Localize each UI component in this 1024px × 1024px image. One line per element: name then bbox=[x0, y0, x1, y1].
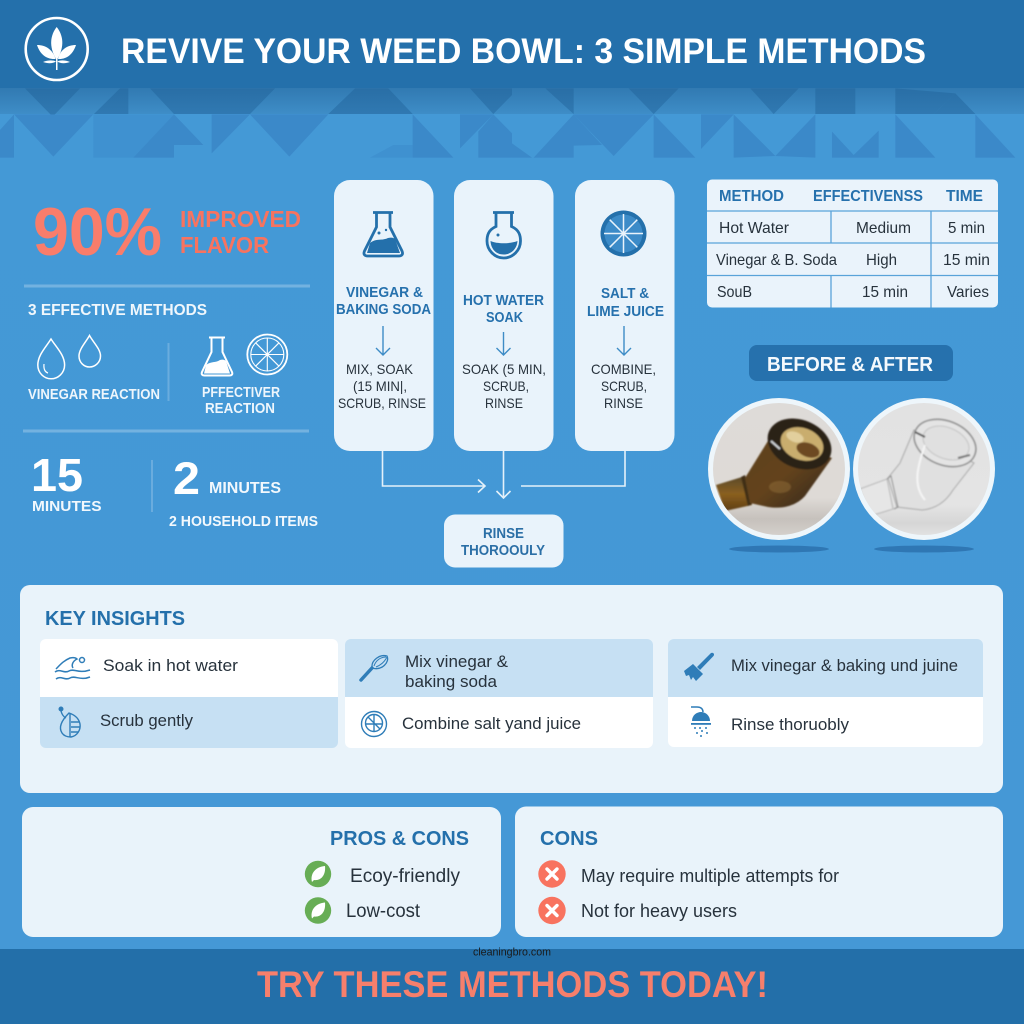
table rows: SouB bbox=[717, 284, 752, 301]
method name: LIME JUICE bbox=[587, 304, 664, 320]
method name bbox=[587, 286, 664, 320]
stat: 15 minutes: MINUTES bbox=[32, 498, 102, 515]
table rows bbox=[716, 220, 990, 301]
insight column 1 bbox=[40, 639, 338, 748]
text: eco friendly: Ecoy-friendly bbox=[350, 866, 460, 887]
panel: salt and lime juice method bbox=[575, 180, 674, 451]
stat: 2 minutes bbox=[173, 453, 281, 504]
text: combine: Combine salt yand juice bbox=[402, 714, 581, 733]
footer banner bbox=[0, 949, 1024, 1024]
geometric triangle pattern band bbox=[0, 88, 1024, 158]
label: vinegar reaction: VINEGAR REACTION bbox=[28, 387, 160, 403]
icon: waves bbox=[55, 658, 90, 679]
panel: cons bbox=[515, 806, 1003, 937]
table rows: Vinegar & B. Soda bbox=[716, 252, 837, 269]
arrow bbox=[617, 326, 631, 355]
label: effectiver reaction: PFFECTIVER bbox=[202, 385, 280, 401]
insight column 3 bbox=[668, 639, 983, 747]
stat: 15 minutes: 15 bbox=[31, 449, 83, 501]
panel: vinegar and baking soda method bbox=[334, 180, 434, 451]
text: rinse: Rinse thoruobly bbox=[731, 715, 849, 734]
method name: BAKING SODA bbox=[336, 302, 431, 318]
steps: SCRUB, RINSE bbox=[338, 395, 426, 411]
method name: HOT WATER bbox=[463, 293, 544, 309]
photo: clean glass pipe after bbox=[853, 398, 995, 552]
steps: COMBINE, bbox=[591, 361, 656, 377]
steps: SCRUB, bbox=[601, 378, 647, 394]
method name: SALT & bbox=[601, 286, 649, 302]
heading: key insights: KEY INSIGHTS bbox=[45, 608, 185, 630]
icon: leaf scrub bbox=[59, 707, 80, 737]
comparison table bbox=[707, 180, 998, 308]
icon: whisk bbox=[361, 656, 388, 680]
table rows: Varies bbox=[947, 284, 989, 301]
steps bbox=[591, 361, 656, 411]
photo: dirty pipe before bbox=[708, 398, 850, 552]
method name bbox=[463, 293, 544, 326]
text: heavy users: Not for heavy users bbox=[581, 901, 737, 921]
text: scrub: Scrub gently bbox=[100, 711, 193, 730]
icon: lemon half bbox=[362, 712, 386, 736]
text: mix bbox=[405, 652, 509, 691]
stat: 15 minutes bbox=[31, 449, 102, 515]
text: low cost: Low-cost bbox=[346, 901, 421, 922]
table rows: 15 min bbox=[862, 284, 908, 301]
title: REVIVE YOUR WEED BOWL: 3 SIMPLE METHODS bbox=[121, 31, 926, 71]
method name bbox=[336, 285, 431, 318]
panel: left statistics bbox=[23, 194, 318, 530]
icon: cross bbox=[538, 860, 566, 888]
icon: lime slice bbox=[600, 210, 646, 256]
table header: METHOD bbox=[719, 188, 784, 205]
label: 2 household items: 2 HOUSEHOLD ITEMS bbox=[169, 514, 318, 530]
table rows: 15 min bbox=[943, 252, 990, 269]
stat label: improved flavor: IMPROVED bbox=[180, 206, 301, 232]
icon: white flask bbox=[202, 338, 232, 376]
box: rinse thoroughly bbox=[444, 514, 564, 568]
panel: key insights bbox=[20, 585, 1003, 793]
steps: MIX, SOAK bbox=[346, 361, 414, 377]
text: mix: Mix vinegar & bbox=[405, 652, 509, 671]
arrow bbox=[376, 326, 390, 355]
call to action: TRY THESE METHODS TODAY! bbox=[257, 964, 768, 1005]
stat label: improved flavor: FLAVOR bbox=[180, 232, 269, 258]
heading: before and after: BEFORE & AFTER bbox=[767, 354, 934, 376]
stat: 2 minutes: 2 bbox=[173, 453, 200, 504]
stat: 90 percent: 90% bbox=[33, 194, 162, 270]
panel: hot water soak method bbox=[454, 180, 554, 451]
heading: before and after bbox=[749, 345, 953, 381]
steps: RINSE bbox=[604, 395, 643, 411]
steps bbox=[338, 361, 426, 411]
icon: round flask bbox=[487, 212, 520, 258]
method name: SOAK bbox=[486, 310, 523, 326]
table rows: High bbox=[866, 252, 897, 269]
table header: TIME bbox=[946, 188, 983, 205]
steps: SCRUB, bbox=[483, 378, 529, 394]
icon: white citrus slice bbox=[247, 334, 287, 374]
icon: leaf check bbox=[305, 861, 331, 887]
steps: (15 MIN|, bbox=[353, 378, 407, 394]
icon: cannabis leaf logo bbox=[26, 18, 88, 80]
insight column 2 bbox=[345, 639, 653, 748]
stat label: improved flavor bbox=[180, 206, 301, 258]
icon: brush bbox=[684, 653, 714, 681]
icon: leaf check bbox=[305, 897, 331, 924]
box: rinse thoroughly: THOROOULY bbox=[461, 543, 545, 559]
panel: pros bbox=[22, 807, 501, 937]
text: soak: Soak in hot water bbox=[103, 656, 238, 675]
table header: EFFECTIVENSS bbox=[813, 188, 923, 205]
text: multiple attempts: May require multiple attempts for bbox=[581, 866, 839, 886]
header banner bbox=[0, 0, 1024, 88]
arrow bbox=[496, 332, 510, 355]
text: mix vinegar baking: Mix vinegar & baking und juine bbox=[731, 656, 958, 675]
table rows: Hot Water bbox=[719, 220, 790, 237]
stat: 2 minutes: MINUTES bbox=[209, 480, 281, 497]
label: effectiver reaction: REACTION bbox=[205, 401, 275, 417]
steps bbox=[462, 361, 546, 411]
icon: cross bbox=[538, 897, 566, 924]
steps: SOAK (5 MIN, bbox=[462, 361, 546, 377]
box: rinse thoroughly: RINSE bbox=[483, 526, 524, 542]
source credit: cleaningbro.com bbox=[473, 946, 551, 958]
icon: water drops bbox=[38, 336, 100, 379]
text: mix: baking soda bbox=[405, 672, 498, 691]
arrows: flow into rinse step bbox=[382, 451, 625, 498]
icon: shower bbox=[691, 707, 711, 737]
steps: RINSE bbox=[485, 395, 523, 411]
label: effectiver reaction bbox=[202, 385, 280, 417]
table rows: Medium bbox=[856, 220, 911, 237]
method name: VINEGAR & bbox=[346, 285, 423, 301]
table header bbox=[719, 188, 983, 205]
heading: pros and cons: PROS & CONS bbox=[330, 828, 469, 850]
heading: 3 effective methods: 3 EFFECTIVE METHODS bbox=[28, 302, 207, 319]
icon: conical flask bbox=[364, 212, 403, 256]
heading: cons: CONS bbox=[540, 828, 598, 850]
table rows: 5 min bbox=[948, 220, 985, 237]
